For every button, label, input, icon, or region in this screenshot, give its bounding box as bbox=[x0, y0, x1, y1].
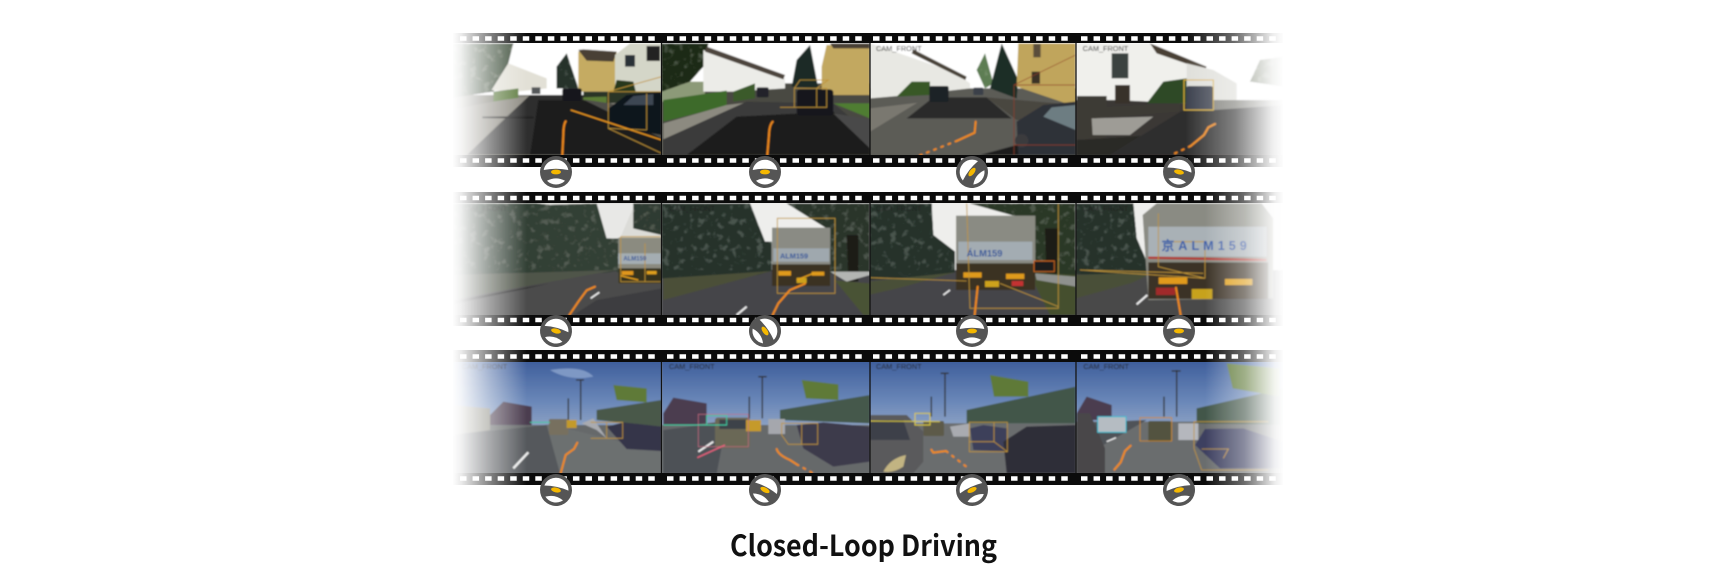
icon: steering wheel straight bbox=[540, 156, 572, 188]
icon: steering wheel left bbox=[951, 469, 993, 511]
film frame: truck ahead with overlay boxes bbox=[868, 202, 1077, 317]
film strip row 2 bbox=[450, 190, 1286, 353]
film frame: CAM_FRONT road with dotted trajectory: CAM_FRONT bbox=[876, 44, 922, 53]
film strip row 1 bbox=[450, 30, 1286, 194]
film strip border and perforations bbox=[453, 33, 1283, 167]
film frame: truck closer on tree-lined road: ALM159 bbox=[780, 251, 808, 260]
film frame: street with hedge and parked car bbox=[662, 40, 872, 157]
right fade bbox=[1185, 30, 1284, 170]
film frame: urban road with parked cars both sides bbox=[868, 360, 1077, 475]
left fade bbox=[452, 30, 527, 170]
film frame: urban road with parked cars both sides: CAM_FRONT bbox=[876, 362, 922, 371]
film frame: urban road with oncoming car: CAM_FRONT bbox=[669, 362, 715, 371]
icon: steering wheel turned left bbox=[950, 150, 994, 194]
film frame: tree-lined road with truck far ahead: CAM_FRONT bbox=[462, 204, 508, 213]
icon: steering wheel turned right bbox=[1160, 153, 1198, 191]
icon: steering wheel straight bbox=[749, 156, 781, 188]
left fade bbox=[452, 348, 527, 487]
icon: steering wheel right bbox=[743, 468, 787, 512]
icon: steering wheel straight bbox=[956, 315, 988, 347]
left fade bbox=[452, 190, 527, 328]
icon: steering wheel straight bbox=[1163, 315, 1195, 347]
film frame: urban road with billboard bbox=[450, 360, 663, 475]
film frame: tree-lined road with truck far ahead bbox=[450, 202, 663, 317]
right fade bbox=[1205, 348, 1284, 487]
film strip row 3 bbox=[450, 348, 1286, 512]
film frame: truck very close: CAM_FRONT bbox=[1083, 204, 1129, 213]
film frame: truck very close: 京ALM159 bbox=[1162, 238, 1251, 253]
film strip border and perforations bbox=[453, 192, 1283, 326]
icon: steering wheel slight right bbox=[537, 471, 575, 509]
film frame: urban road with oncoming car bbox=[662, 360, 872, 475]
icon: steering wheel slight right bbox=[536, 311, 576, 351]
film frame: residential street, parked car bbox=[450, 40, 663, 157]
film frame: tree-lined road with truck far ahead: ALM159 bbox=[623, 257, 647, 263]
right fade bbox=[1205, 190, 1284, 328]
film frame: urban road near faded right edge: CAM_FRONT bbox=[1083, 362, 1129, 371]
icon: steering wheel slight left bbox=[1160, 471, 1198, 509]
film strip border and perforations bbox=[453, 350, 1283, 485]
film frame: CAM_FRONT street with van bbox=[1076, 40, 1286, 157]
film frame: urban road near faded right edge bbox=[1076, 360, 1286, 475]
film frame: CAM_FRONT street with van: CAM_FRONT bbox=[1083, 44, 1129, 53]
film frame: truck closer on tree-lined road bbox=[662, 202, 872, 317]
film frame: truck ahead with overlay boxes: CAM_FRONT bbox=[876, 204, 922, 213]
film frame: CAM_FRONT road with dotted trajectory bbox=[868, 40, 1077, 157]
film frame: truck closer on tree-lined road: CAM_FRONT bbox=[669, 204, 715, 213]
film frame: urban road with billboard: CAM_FRONT bbox=[462, 362, 508, 371]
icon: steering wheel turned right bbox=[743, 309, 787, 353]
film frame: truck very close bbox=[1076, 202, 1286, 317]
title: Closed-Loop Driving bbox=[730, 523, 997, 565]
film frame: truck ahead with overlay boxes: ÁLM159 bbox=[967, 248, 1002, 258]
